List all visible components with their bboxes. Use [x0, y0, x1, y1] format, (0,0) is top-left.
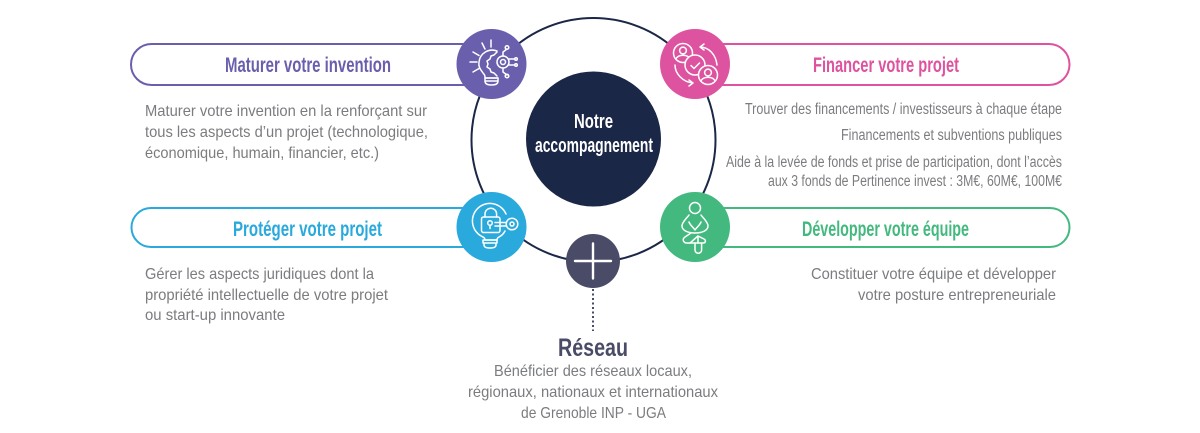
panel: financer	[695, 44, 1070, 190]
pill: développer	[695, 208, 1070, 247]
text: financer: aux 3 fonds de Pertinence invest : 3M€, 60M€, 100M€	[768, 173, 1062, 190]
icon: bulb with padlock and key	[456, 192, 526, 262]
text: maturer: tous les aspects d’un projet (technologique,	[145, 124, 428, 141]
centre circle: accompagnement	[535, 135, 653, 157]
panel: protéger	[132, 208, 491, 324]
text: développer: votre posture entrepreneuriale	[858, 287, 1056, 304]
dotted connector	[592, 289, 594, 331]
panel: maturer	[131, 44, 491, 162]
icon: plus	[566, 234, 620, 288]
text: protéger	[145, 266, 389, 324]
text: réseau: régionaux, nationaux et internationaux	[468, 384, 718, 401]
icon: light bulb with circuit	[456, 29, 526, 99]
pill: protéger	[132, 208, 491, 247]
text: financer: Aide à la levée de fonds et prise de participation, dont l’accès	[726, 154, 1062, 171]
text: réseau	[468, 363, 718, 422]
icon: people exchange	[660, 29, 730, 99]
centre circle	[526, 72, 661, 206]
text: maturer: économique, humain, financier, etc.)	[145, 145, 379, 162]
text: développer	[811, 266, 1057, 304]
heading: développer: Développer votre équipe	[802, 218, 969, 241]
text: réseau: Bénéficier des réseaux locaux,	[494, 363, 692, 380]
text: développer: Constituer votre équipe et développer	[811, 266, 1057, 283]
text: protéger: propriété intellectuelle de votre projet	[145, 287, 389, 304]
heading: financer: Financer votre projet	[813, 54, 959, 77]
heading: maturer: Maturer votre invention	[225, 54, 391, 77]
text: maturer: Maturer votre invention en la renforçant sur	[145, 103, 428, 120]
outer ring	[472, 18, 716, 262]
text: financer: Trouver des financements / investisseurs à chaque étape	[745, 101, 1062, 118]
text: financer: Financements et subventions publiques	[841, 127, 1062, 144]
text: réseau: de Grenoble INP - UGA	[521, 405, 666, 422]
pill: financer	[695, 44, 1070, 85]
heading: protéger: Protéger votre projet	[233, 218, 382, 241]
text: maturer	[145, 103, 428, 162]
icon: yoga pose	[660, 192, 730, 262]
text: financer	[726, 101, 1062, 190]
text: protéger: ou start-up innovante	[145, 307, 285, 324]
centre circle: Notre	[574, 111, 613, 133]
panel: réseau	[468, 334, 718, 422]
heading: réseau: Réseau	[558, 334, 628, 362]
text: protéger: Gérer les aspects juridiques dont la	[145, 266, 374, 283]
panel: développer	[695, 208, 1070, 304]
pill: maturer	[131, 44, 491, 85]
